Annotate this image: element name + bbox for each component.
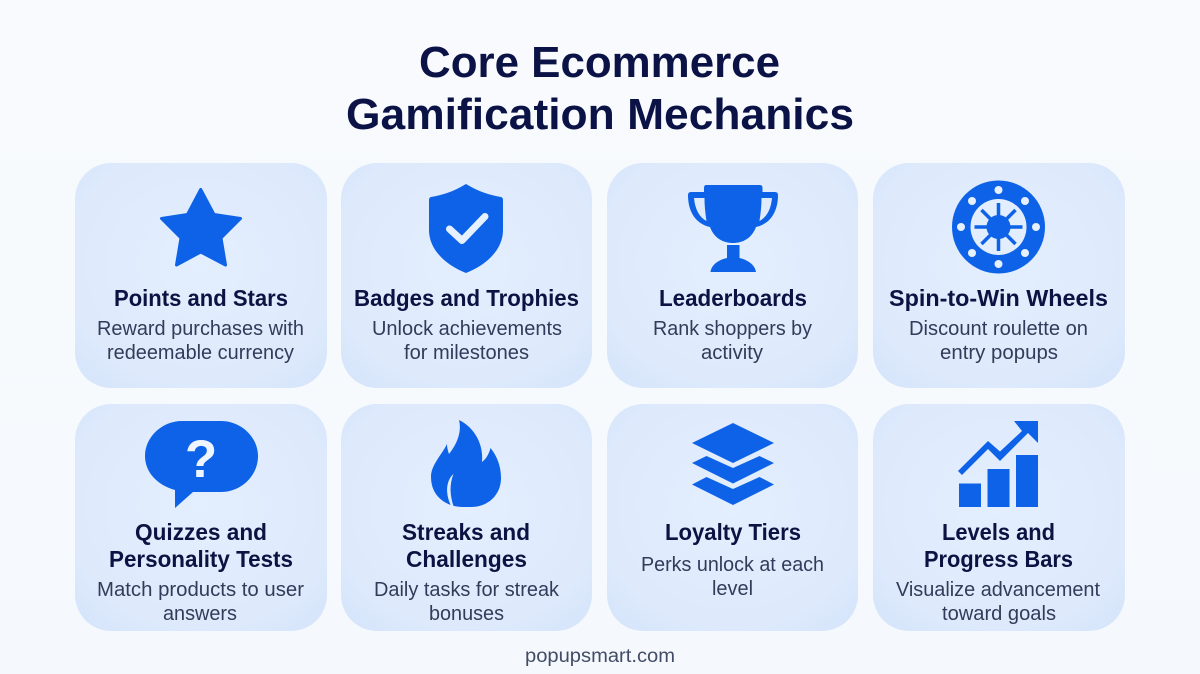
heading: levels and progress bars: Levels and — [942, 519, 1055, 545]
description: quizzes and personality tests — [97, 579, 304, 625]
heading: levels and progress bars: Progress Bars — [924, 546, 1073, 572]
description: quizzes and personality tests: answers — [163, 603, 237, 625]
heading: quizzes and personality tests: Personality Tests — [109, 546, 293, 572]
panel: loyalty tiers — [607, 404, 858, 631]
icon: question speech bubble — [145, 421, 258, 508]
panel: badges and trophies — [341, 163, 592, 388]
icon: flame — [431, 420, 501, 508]
description: points and stars — [97, 318, 304, 364]
heading: levels and progress bars — [924, 519, 1073, 572]
description: levels and progress bars: Visualize advancement — [896, 579, 1100, 601]
title: Core Ecommerce — [419, 38, 780, 87]
panel: points and stars — [75, 163, 327, 388]
heading: loyalty tiers: Loyalty Tiers — [665, 519, 801, 545]
panel: quizzes and personality tests — [75, 404, 327, 631]
description: badges and trophies: Unlock achievements — [372, 318, 562, 340]
footer: website: popupsmart.com — [525, 646, 675, 667]
icon: trophy — [688, 185, 778, 272]
heading: points and stars: Points and Stars — [114, 285, 288, 311]
description: badges and trophies: for milestones — [404, 342, 529, 364]
icon: stacked layers — [692, 423, 774, 505]
description: spin-to-win wheels: Discount roulette on — [909, 318, 1088, 340]
description: streaks and challenges: bonuses — [429, 603, 504, 625]
icon: question speech bubble: ? — [185, 430, 217, 489]
panel: levels and progress bars — [873, 404, 1125, 631]
heading: leaderboards: Leaderboards — [659, 285, 807, 311]
heading: badges and trophies: Badges and Trophies — [354, 285, 579, 311]
panel: leaderboards — [607, 163, 858, 388]
description: leaderboards: Rank shoppers by — [653, 318, 812, 340]
description: loyalty tiers: Perks unlock at each — [641, 554, 824, 576]
description: leaderboards: activity — [701, 342, 763, 364]
description: levels and progress bars — [896, 579, 1100, 625]
description: spin-to-win wheels — [909, 318, 1088, 364]
heading: spin-to-win wheels: Spin-to-Win Wheels — [889, 285, 1108, 311]
panel: streaks and challenges — [341, 404, 592, 631]
description: points and stars: redeemable currency — [107, 342, 294, 364]
title — [346, 38, 854, 139]
icon: star — [162, 190, 240, 265]
description: points and stars: Reward purchases with — [97, 318, 304, 340]
description: streaks and challenges — [374, 579, 560, 625]
heading: quizzes and personality tests: Quizzes and — [135, 519, 267, 545]
heading: streaks and challenges: Challenges — [406, 546, 527, 572]
description: badges and trophies — [372, 318, 562, 364]
heading: streaks and challenges — [402, 519, 530, 572]
icon: rising bar chart with arrow — [958, 421, 1038, 507]
description: loyalty tiers — [641, 554, 824, 600]
panel: spin-to-win wheels — [873, 163, 1125, 388]
description: loyalty tiers: level — [712, 578, 753, 600]
title: Gamification Mechanics — [346, 90, 854, 139]
description: streaks and challenges: Daily tasks for streak — [374, 579, 560, 601]
description: leaderboards — [653, 318, 812, 364]
heading: quizzes and personality tests — [109, 519, 293, 572]
icon: shield with check — [429, 184, 503, 273]
description: spin-to-win wheels: entry popups — [940, 342, 1058, 364]
icon: prize wheel — [952, 180, 1045, 274]
description: levels and progress bars: toward goals — [942, 603, 1056, 625]
heading: streaks and challenges: Streaks and — [402, 519, 530, 545]
description: quizzes and personality tests: Match products to user — [97, 579, 304, 601]
